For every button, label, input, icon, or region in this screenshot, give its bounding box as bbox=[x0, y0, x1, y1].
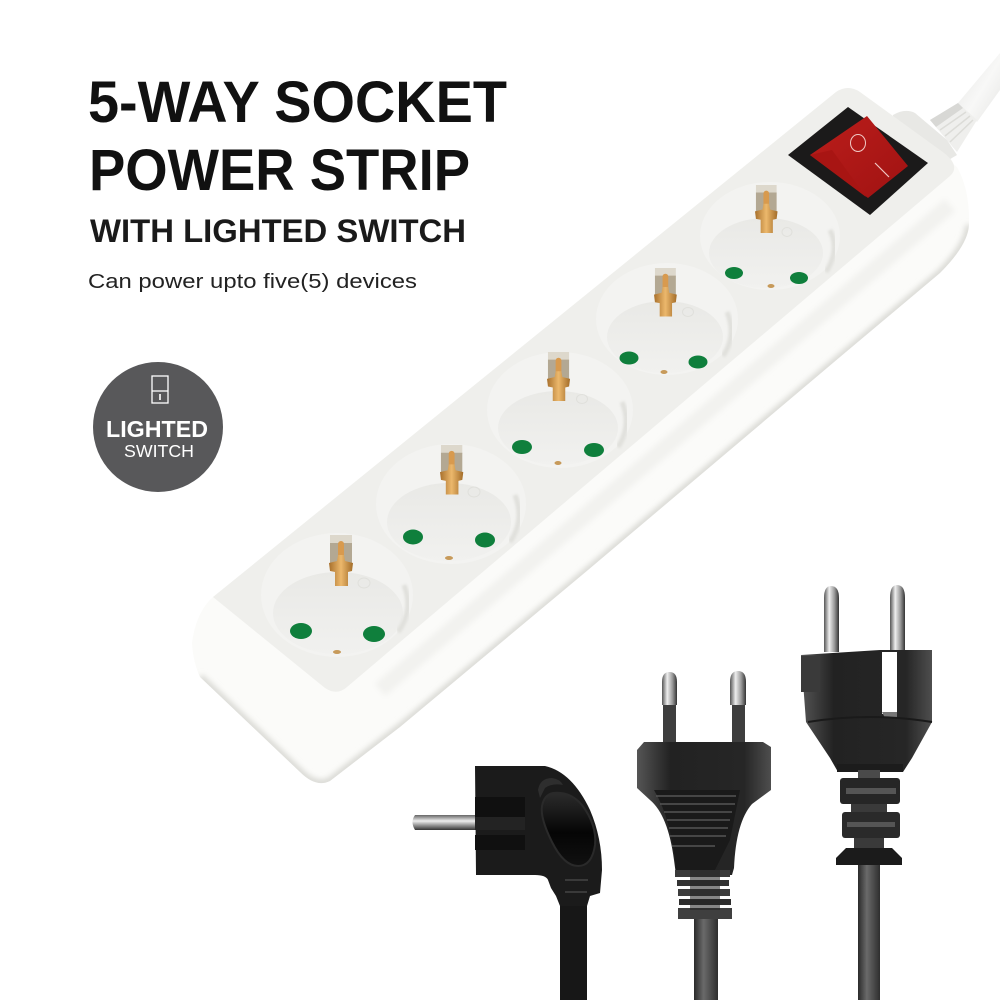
title: 5-WAY SOCKET bbox=[88, 70, 507, 135]
socket 1 bbox=[261, 533, 413, 657]
plug: euro two-pin bbox=[637, 671, 771, 1000]
power cord bbox=[893, 53, 1000, 165]
plug body bbox=[637, 742, 771, 875]
subtitle: WITH LIGHTED SWITCH bbox=[90, 213, 466, 249]
plug body bbox=[475, 766, 602, 906]
ground pin bbox=[329, 535, 353, 586]
plug: schuko straight bbox=[801, 585, 932, 1000]
strip body bbox=[192, 88, 969, 783]
ground pin bbox=[547, 352, 570, 401]
socket 5 bbox=[700, 182, 840, 290]
socket 2 bbox=[376, 444, 526, 564]
icon: wall switch bbox=[152, 376, 168, 403]
ground pin bbox=[440, 445, 463, 494]
lower edge shading bbox=[200, 205, 969, 783]
title: POWER STRIP bbox=[89, 138, 470, 203]
strip top face bbox=[213, 88, 954, 692]
ground pin bbox=[412, 815, 476, 830]
badge: lighted switch: LIGHTED bbox=[106, 416, 208, 442]
plug: angled schuko bbox=[412, 766, 602, 1000]
pins bbox=[662, 671, 746, 743]
finger grip oval bbox=[542, 793, 595, 866]
cable bbox=[694, 915, 718, 1000]
pins bbox=[824, 585, 905, 652]
ground pin bbox=[755, 185, 778, 233]
description text: Can power upto five(5) devices bbox=[88, 270, 417, 293]
cable bbox=[858, 862, 880, 1000]
rocker switch bbox=[788, 107, 928, 215]
badge: lighted switch: SWITCH bbox=[124, 441, 194, 461]
cable bbox=[560, 900, 587, 1000]
ground pin bbox=[654, 268, 677, 316]
plug body bbox=[801, 650, 932, 772]
socket 3 bbox=[487, 352, 633, 468]
strain relief bbox=[836, 770, 902, 865]
badge: lighted switch bbox=[93, 362, 223, 492]
strain relief bbox=[675, 870, 732, 919]
power strip bbox=[192, 88, 969, 783]
title bbox=[88, 70, 507, 203]
socket 4 bbox=[596, 263, 738, 375]
